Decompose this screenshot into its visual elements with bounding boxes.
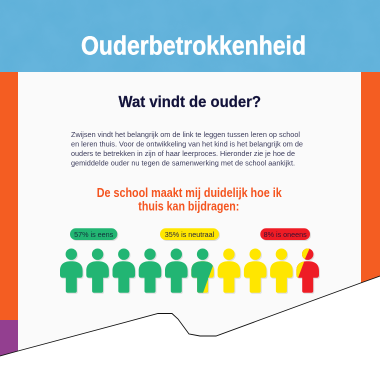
legend pill: 8% is oneens — [260, 228, 311, 241]
text block: introduction: en leren thuis. Voor de ontwikkeling van het kind is het belangrijk om de — [71, 140, 303, 148]
heading: statement: De school maakt mij duidelijk hoe ik — [97, 185, 282, 200]
person 7 — [218, 248, 240, 293]
heading: statement: thuis kan bijdragen: — [138, 199, 239, 214]
person 2 — [86, 248, 109, 293]
person 4 — [139, 248, 161, 293]
person 9 — [270, 248, 293, 293]
text block: introduction — [71, 130, 303, 168]
panel: header band — [0, 0, 380, 72]
legend pill: 35% is neutraal — [160, 228, 220, 241]
text block: introduction: Zwijsen vindt het belangrijk om de link te leggen tussen leren op school — [71, 130, 300, 139]
heading: Wat vindt de ouder: Wat vindt de ouder? — [118, 94, 261, 111]
person 1 — [60, 248, 83, 293]
legend pill: 57% is eens: 57% is eens — [74, 230, 114, 239]
person 3 — [112, 248, 135, 293]
heading: statement — [97, 185, 282, 214]
person 8 — [244, 248, 266, 293]
title: Ouderbetrokkenheid — [81, 32, 306, 60]
text block: introduction: ouders te betrekken in zijn of haar leerproces. Hieronder zie je hoe de — [71, 149, 295, 158]
person 10: yellow and red — [296, 248, 319, 293]
legend pill: 35% is neutraal: 35% is neutraal — [165, 230, 215, 239]
person 5 — [165, 248, 188, 293]
torn paper edge — [0, 276, 380, 374]
legend pill: 8% is oneens: 8% is oneens — [264, 230, 307, 239]
text block: introduction: gemiddelde ouder nu tegen de samenwerking met de school aankijkt. — [71, 159, 295, 168]
panel: page background — [0, 72, 380, 362]
person 6: green and yellow — [191, 248, 214, 293]
legend pill: 57% is eens — [70, 228, 118, 241]
chart: people pictogram — [60, 248, 319, 293]
